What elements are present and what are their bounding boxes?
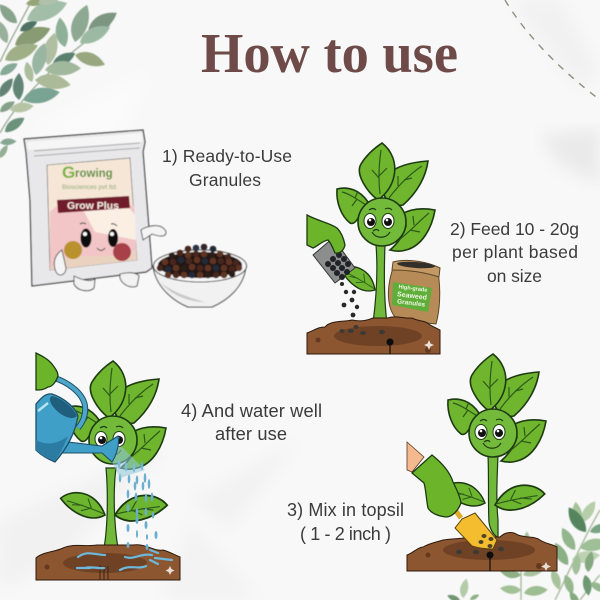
arm and glove: [407, 442, 424, 472]
step 3 text: [287, 500, 404, 544]
lower leaves: [442, 473, 488, 515]
step 1 illustration: granule pouch and bowl: Biosciences pvt ltd.: [62, 184, 118, 191]
lower leaves: [60, 482, 108, 528]
decorative dashed arc: [505, 0, 600, 100]
step 2 text: [450, 219, 579, 286]
pouch arms and feet: [141, 226, 166, 240]
plant crown: [448, 354, 546, 462]
step 2 text: on size: [487, 266, 542, 286]
plant crown: [337, 143, 435, 251]
pouch: [24, 130, 152, 286]
step 1 text: Granules: [189, 170, 261, 190]
step 4 text: after use: [215, 423, 287, 444]
step 1 text: 1) Ready-to-Use: [162, 146, 292, 166]
title: How to use: [201, 23, 458, 85]
watering can: [50, 377, 85, 428]
gloved hand: [36, 353, 58, 390]
sack: High-grade: [398, 284, 428, 294]
falling granules: [340, 282, 359, 317]
step 1 illustration: granule pouch and bowl: [24, 130, 246, 307]
step 2 text: 2) Feed 10 - 20g: [450, 219, 579, 239]
gloved hand: [307, 215, 345, 253]
sack: [388, 260, 440, 324]
step 4 text: 4) And water well: [181, 400, 322, 421]
stem: [104, 468, 118, 548]
lower leaf: [340, 258, 379, 299]
stem: [373, 245, 387, 323]
spray: [112, 446, 145, 478]
step 4 illustration: plant being watered: [36, 353, 180, 580]
step 3 text: ( 1 - 2 inch ): [300, 524, 391, 544]
foliage: bottom right branches: [446, 499, 600, 600]
foliage: top left branches: [0, 0, 120, 159]
step 3 illustration: plant with trowel: [407, 354, 557, 571]
step 4 text: [181, 400, 322, 444]
step 2 illustration: plant with granule jar and sack: [307, 143, 440, 354]
soil: [36, 545, 180, 580]
step 1 illustration: granule pouch and bowl: rowing: [75, 168, 113, 180]
pouch label: [47, 158, 137, 270]
step 1 illustration: granule pouch and bowl: G: [62, 163, 75, 182]
step 2 text: per plant based: [452, 242, 578, 262]
soil: [307, 317, 440, 354]
trowel: [450, 503, 497, 549]
plant crown: [68, 361, 166, 469]
granules: [157, 244, 242, 278]
stem: [488, 455, 498, 538]
bowl: [153, 266, 246, 307]
step 1 illustration: granule pouch and bowl: Grow Plus: [67, 200, 119, 212]
sack: Seaweed: [397, 291, 427, 302]
step 3 text: 3) Mix in topsil: [287, 500, 404, 520]
sack: Granules: [397, 298, 426, 309]
water drops: [118, 460, 158, 550]
soil: [407, 533, 557, 571]
pouch face: [80, 228, 92, 248]
step 1 text: [162, 146, 292, 190]
jar: [313, 238, 355, 283]
